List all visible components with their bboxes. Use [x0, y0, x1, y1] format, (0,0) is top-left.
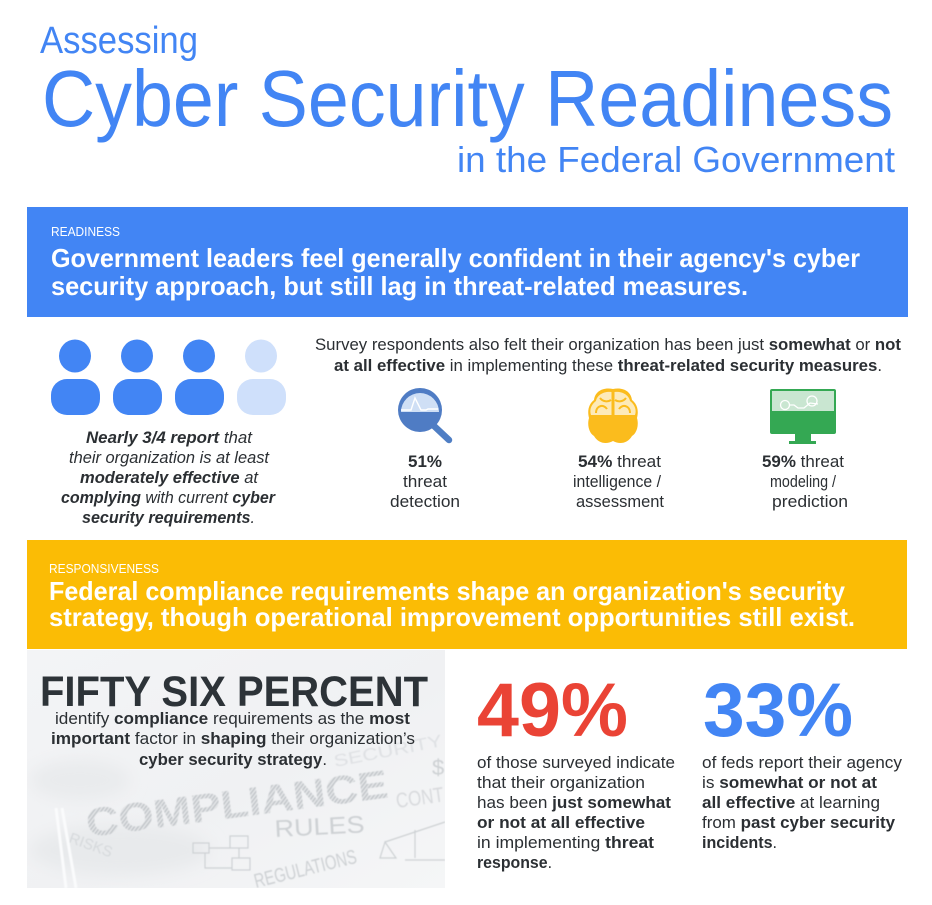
text block: three quarters report: security requirements. — [82, 508, 255, 527]
compliance photo background: $ — [432, 755, 444, 780]
stat: 49 percent: in implementing threat — [477, 833, 654, 852]
stat: 49 percent: 49% — [477, 668, 628, 753]
panel: readiness banner: READINESS — [51, 224, 120, 239]
label: threat modeling: 59% threat — [762, 452, 844, 471]
icon: monitor — [770, 389, 836, 444]
text block: three quarters report: their organization is at least — [69, 448, 270, 467]
title: in the Federal Government — [457, 139, 895, 180]
text block: compliance: identify compliance requirements as the most — [55, 709, 410, 728]
icon: people pictogram — [51, 340, 286, 415]
compliance photo background: RULES — [274, 811, 365, 843]
text block: compliance: important factor in shaping their organization’s — [51, 729, 415, 748]
text block: three quarters report: Nearly 3/4 report that — [86, 428, 253, 447]
text block: compliance — [51, 709, 415, 769]
compliance photo background: SECURITY — [332, 731, 444, 771]
text block: survey respondents: Survey respondents also felt their organization has been just somewhat or not — [315, 335, 901, 354]
icon: brain — [588, 389, 638, 443]
text block: three quarters report: moderately effective at — [80, 468, 259, 487]
label: threat detection: threat — [403, 472, 447, 491]
icon: magnifying glass — [398, 388, 449, 440]
stat: 33 percent — [702, 668, 902, 852]
panel: readiness banner: security approach, but still lag in threat-related measures. — [51, 271, 748, 301]
stat: 33 percent: is somewhat or not at — [702, 773, 877, 792]
panel: responsiveness banner: strategy, though operational improvement opportunities still exist. — [49, 602, 855, 632]
panel: fifty six percent — [27, 650, 445, 893]
label: threat detection: detection — [390, 492, 460, 511]
title — [40, 20, 895, 180]
panel: responsiveness banner — [27, 540, 907, 649]
stat: 49 percent: or not at all effective — [477, 813, 645, 832]
stat: 49 percent: that their organization — [477, 773, 645, 792]
title: Assessing — [40, 20, 198, 62]
label: threat modeling: prediction — [772, 492, 848, 511]
stat: 33 percent: of feds report their agency — [702, 753, 902, 772]
panel: readiness banner: Government leaders feel generally confident in their agency's cyber — [51, 243, 860, 273]
compliance photo background: CONT — [394, 783, 445, 813]
stat: 49 percent: response. — [477, 853, 552, 872]
compliance photo background: REGULATIONS — [252, 846, 359, 893]
stat: 33 percent: all effective at learning — [702, 793, 880, 812]
compliance photo background: COMPLIANCE — [83, 763, 391, 846]
stat: 49 percent: of those surveyed indicate — [477, 753, 675, 772]
stat: 33 percent: 33% — [703, 668, 853, 753]
panel: readiness banner — [27, 207, 908, 317]
stat: 49 percent — [477, 668, 675, 872]
text block: survey respondents — [315, 335, 901, 375]
text block: survey respondents: at all effective in implementing these threat-related security measures. — [334, 356, 882, 375]
stat: 49 percent: has been just somewhat — [477, 793, 671, 812]
text block: three quarters report: complying with current cyber — [61, 488, 276, 507]
stat: 33 percent: from past cyber security — [702, 813, 896, 832]
compliance photo background: RISKS — [67, 830, 115, 861]
label: threat detection — [390, 452, 460, 511]
label: threat intelligence: 54% threat — [578, 452, 661, 471]
label: threat intelligence: intelligence / — [573, 472, 661, 491]
panel: responsiveness banner: RESPONSIVENESS — [49, 561, 159, 576]
compliance photo background — [27, 650, 445, 893]
label: threat detection: 51% — [408, 452, 442, 471]
label: threat intelligence: assessment — [576, 492, 664, 511]
panel: responsiveness banner: Federal compliance requirements shape an organization's security — [49, 576, 846, 606]
label: threat modeling: modeling / — [770, 472, 836, 491]
label: threat modeling — [762, 452, 848, 511]
heading: fifty six percent: FIFTY SIX PERCENT — [40, 668, 428, 716]
text block: compliance: cyber security strategy. — [139, 750, 327, 769]
label: threat intelligence — [573, 452, 664, 511]
text block: three quarters report — [61, 428, 276, 527]
stat: 33 percent: incidents. — [702, 833, 777, 852]
